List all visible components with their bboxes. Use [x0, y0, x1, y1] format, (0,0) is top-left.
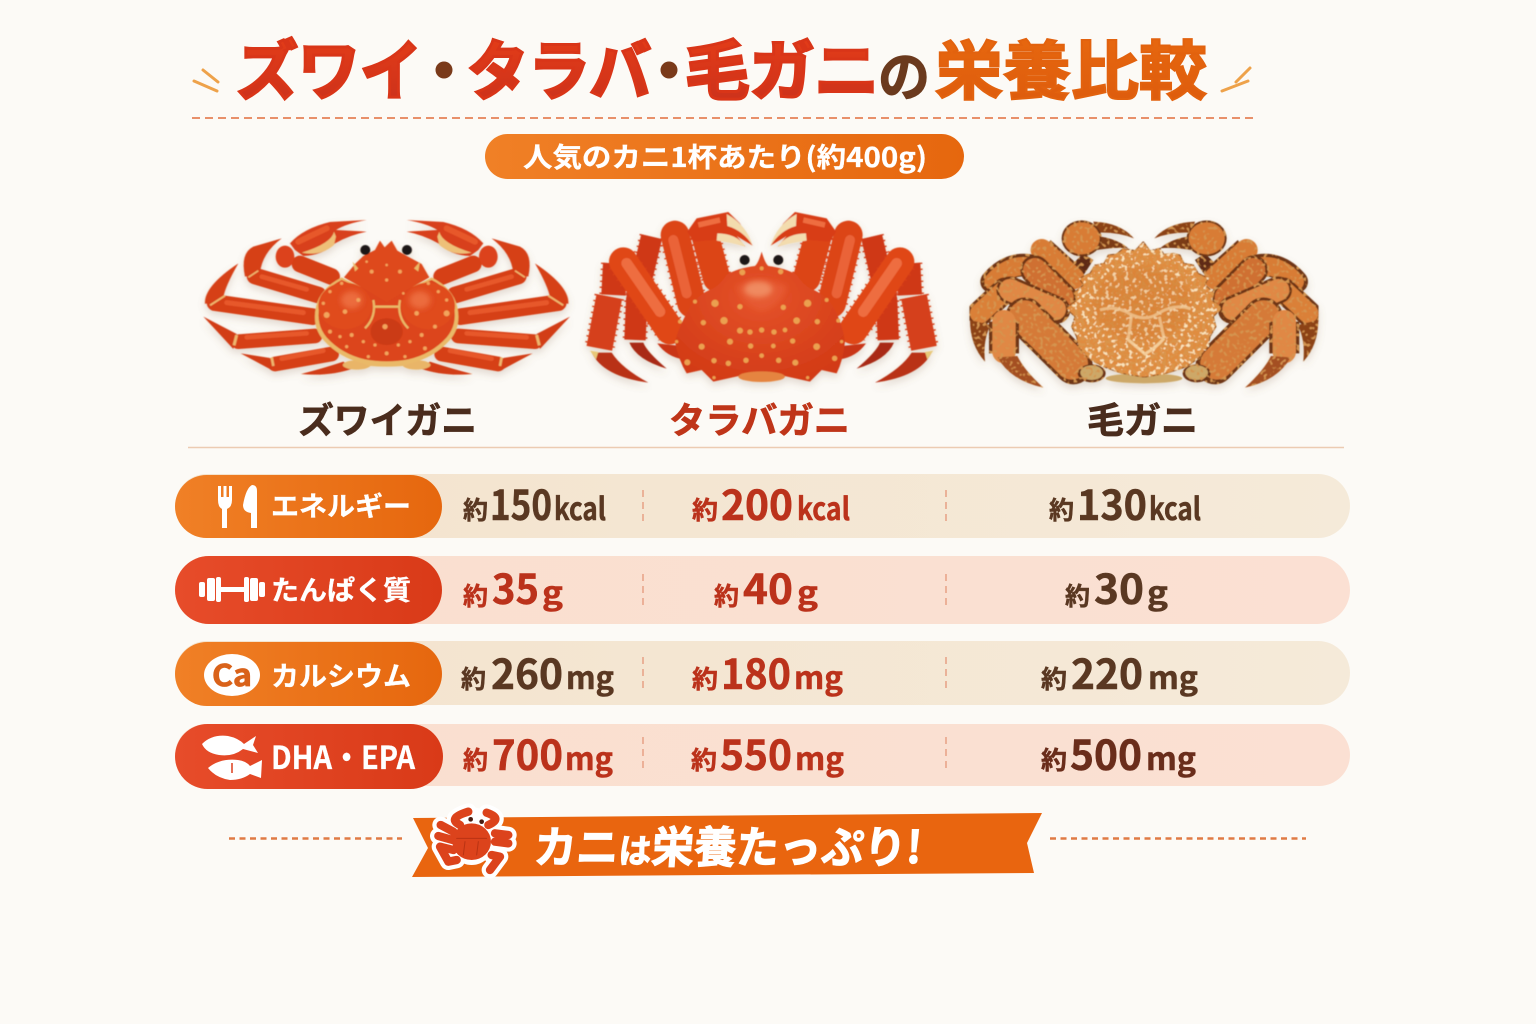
- value: タラバガニ energy: 200: [721, 472, 793, 532]
- species name: ズワイガニ: ズワイガニ: [298, 392, 477, 444]
- value: ズワイガニ calcium: [461, 641, 614, 701]
- value: タラバガニ DHA EPA: 約: [691, 741, 717, 777]
- value: 毛ガニ energy: 130: [1077, 472, 1147, 532]
- value: ズワイガニ energy: 約: [463, 491, 488, 527]
- icon: calcium badge: Ca: [212, 651, 252, 695]
- value: ズワイガニ DHA EPA: 約: [463, 741, 488, 777]
- icon: calcium badge: [204, 651, 260, 696]
- label pill: DHA・EPA: DHA・EPA: [271, 733, 415, 779]
- value: タラバガニ calcium: 180: [721, 641, 791, 701]
- value: 毛ガニ DHA EPA: mg: [1146, 734, 1196, 779]
- column dividers: [643, 490, 946, 773]
- label pill: DHA・EPA: [175, 724, 443, 789]
- value: タラバガニ energy: kcal: [797, 484, 850, 529]
- value: ズワイガニ calcium: 約: [461, 660, 486, 696]
- crab illustration: タラバガニ: [590, 212, 933, 383]
- title dashed divider: [192, 117, 1255, 119]
- value: タラバガニ protein: g: [797, 568, 818, 613]
- value: ズワイガニ energy: 150: [490, 472, 552, 532]
- value: タラバガニ energy: 約: [692, 491, 718, 527]
- value: 毛ガニ energy: 約: [1049, 491, 1074, 527]
- title: 栄養比較: [935, 21, 1207, 113]
- value: 毛ガニ energy: [1049, 472, 1201, 532]
- value: 毛ガニ calcium: 220: [1071, 641, 1143, 701]
- value: ズワイガニ energy: [463, 472, 606, 532]
- value: 毛ガニ protein: 約: [1065, 577, 1090, 613]
- value: 毛ガニ protein: 30: [1094, 556, 1144, 616]
- value: タラバガニ calcium: [692, 641, 843, 701]
- value: 毛ガニ DHA EPA: 500: [1070, 722, 1142, 782]
- subtitle pill: 人気のカニ1杯あたり(約400g): [523, 136, 927, 175]
- value: 毛ガニ protein: [1065, 556, 1168, 616]
- row: カルシウム: [175, 641, 1350, 706]
- icon: fork and knife: [218, 485, 257, 528]
- value: タラバガニ DHA EPA: 550: [720, 722, 792, 782]
- value: 毛ガニ DHA EPA: 約: [1041, 741, 1067, 777]
- title: の: [878, 33, 930, 112]
- value: 毛ガニ DHA EPA: [1041, 722, 1196, 782]
- title accent marks: [194, 68, 1250, 91]
- label pill: たんぱく質: [175, 556, 442, 624]
- value: タラバガニ energy: [692, 472, 850, 532]
- subtitle pill: [485, 134, 964, 179]
- row: DHA・EPA: [175, 722, 1350, 789]
- row: エネルギー: [175, 472, 1350, 538]
- species name: タラバガニ: タラバガニ: [669, 392, 850, 444]
- value: 毛ガニ calcium: mg: [1148, 653, 1198, 698]
- title: [236, 19, 1207, 113]
- label pill: カルシウム: [175, 642, 442, 706]
- label pill: カルシウム: カルシウム: [271, 655, 411, 694]
- value: ズワイガニ energy: kcal: [554, 484, 606, 529]
- icon: dumbbell: [199, 577, 265, 602]
- value: ズワイガニ DHA EPA: [463, 722, 613, 782]
- label pill: エネルギー: [175, 475, 442, 538]
- footer ribbon banner: [412, 808, 1042, 877]
- value: タラバガニ DHA EPA: [691, 722, 844, 782]
- value: ズワイガニ DHA EPA: 700: [492, 722, 563, 782]
- value: ズワイガニ protein: 約: [463, 577, 488, 613]
- value: タラバガニ calcium: 約: [692, 660, 718, 696]
- value: ズワイガニ calcium: mg: [566, 653, 614, 698]
- value: ズワイガニ protein: [463, 556, 563, 616]
- crab illustration: 毛ガニ: [970, 220, 1318, 388]
- value: タラバガニ protein: [714, 556, 818, 616]
- value: ズワイガニ calcium: 260: [491, 641, 563, 701]
- footer dashed line right: [1050, 837, 1306, 840]
- label pill: エネルギー: エネルギー: [271, 485, 411, 524]
- value: ズワイガニ DHA EPA: mg: [565, 734, 613, 779]
- value: タラバガニ calcium: mg: [794, 653, 843, 698]
- value: タラバガニ protein: 約: [714, 577, 739, 613]
- icon: mini crab sticker: [438, 808, 508, 870]
- value: ズワイガニ protein: 35: [492, 556, 539, 616]
- title: タラバ: [467, 19, 651, 113]
- title: 毛ガニ: [685, 19, 879, 113]
- value: タラバガニ protein: 40: [743, 556, 793, 616]
- value: ズワイガニ protein: g: [542, 568, 563, 613]
- value: タラバガニ DHA EPA: mg: [795, 734, 844, 779]
- label pill: たんぱく質: たんぱく質: [271, 569, 411, 608]
- value: 毛ガニ protein: g: [1147, 568, 1168, 613]
- value: 毛ガニ calcium: 約: [1041, 660, 1067, 696]
- crab illustration: ズワイガニ: [203, 220, 570, 375]
- divider line: [188, 446, 1344, 448]
- value: 毛ガニ energy: kcal: [1149, 484, 1201, 529]
- footer ribbon banner: カニは栄養たっぷり!: [532, 812, 925, 876]
- icon: fish pair: [202, 736, 262, 780]
- row: たんぱく質: [175, 556, 1350, 624]
- value: 毛ガニ calcium: [1041, 641, 1198, 701]
- species name: 毛ガニ: 毛ガニ: [1087, 392, 1198, 444]
- footer dashed line left: [229, 837, 402, 840]
- title: ズワイ: [236, 19, 422, 113]
